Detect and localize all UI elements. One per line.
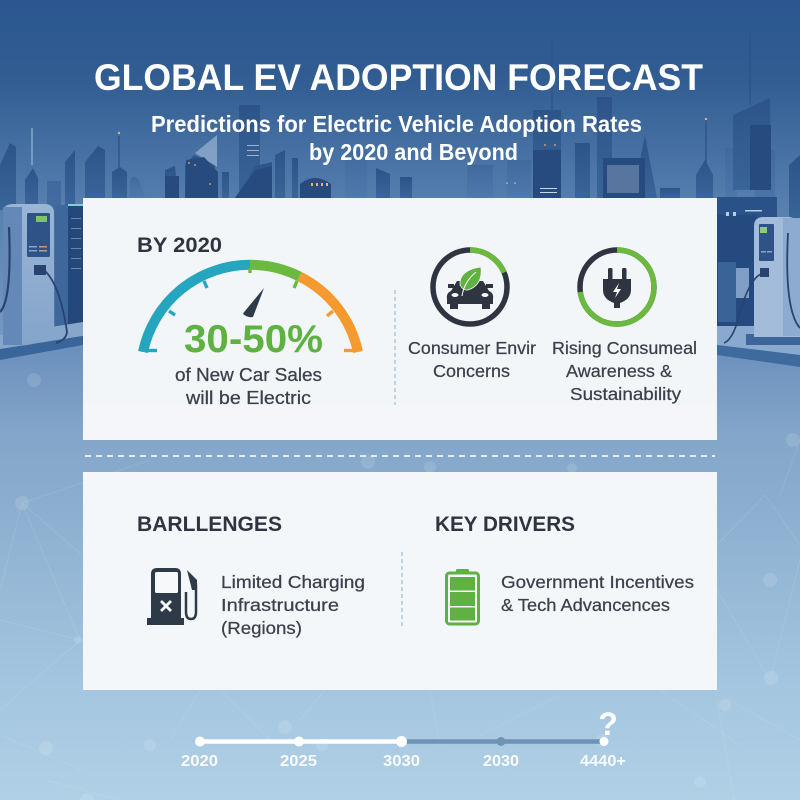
subtitle bbox=[151, 111, 642, 165]
big value: 30-50% bbox=[184, 318, 323, 361]
timeline bbox=[181, 706, 626, 770]
timeline labels: 2030 bbox=[483, 753, 519, 770]
city skyline bbox=[0, 33, 800, 341]
title: GLOBAL EV ADOPTION FORECAST bbox=[94, 57, 703, 98]
heading: key drivers: KEY DRIVERS bbox=[435, 512, 575, 536]
label: consumer concerns: Consumer Envir bbox=[408, 338, 536, 358]
label: consumer concerns bbox=[408, 338, 536, 381]
icon: plug bbox=[580, 250, 654, 324]
network background lines bbox=[0, 440, 800, 800]
label: rising awareness: Rising Consumeal bbox=[552, 338, 697, 358]
text: government incentives bbox=[501, 572, 694, 615]
gauge bbox=[143, 265, 358, 352]
gauge needle bbox=[243, 288, 264, 317]
label: rising awareness: Awareness & bbox=[566, 361, 672, 381]
subtitle: Predictions for Electric Vehicle Adoption Rates bbox=[151, 111, 642, 137]
heading: challenges: BARLLENGES bbox=[137, 512, 282, 536]
text: limited charging: Limited Charging bbox=[221, 572, 365, 592]
icon: fuel pump bbox=[147, 568, 197, 625]
icon: left charging station bbox=[0, 204, 67, 346]
timeline labels bbox=[181, 753, 626, 770]
timeline labels: 3030 bbox=[383, 753, 420, 770]
text: limited charging: Infrastructure bbox=[221, 595, 339, 615]
gauge caption bbox=[175, 365, 322, 408]
icon: right charging station bbox=[724, 217, 800, 345]
panel: challenges and drivers bbox=[83, 472, 717, 690]
timeline labels: 2025 bbox=[280, 753, 317, 770]
label: rising awareness bbox=[552, 338, 697, 404]
right building block bbox=[717, 197, 777, 337]
icon: car with leaf bbox=[433, 250, 507, 324]
icon: battery bbox=[446, 569, 478, 624]
text: limited charging: (Regions) bbox=[221, 618, 302, 638]
question mark: ? bbox=[598, 706, 618, 742]
timeline labels: 4440+ bbox=[580, 753, 626, 770]
heading: by 2020: BY 2020 bbox=[137, 233, 222, 257]
gauge caption: of New Car Sales bbox=[175, 365, 322, 385]
text: government incentives: Government Incentives bbox=[501, 572, 694, 592]
text: limited charging bbox=[221, 572, 365, 638]
text: government incentives: & Tech Advancences bbox=[501, 595, 670, 615]
label: consumer concerns: Concerns bbox=[433, 361, 510, 381]
label: rising awareness: Sustainability bbox=[570, 384, 681, 404]
panel: forecast bbox=[83, 198, 717, 440]
road bbox=[0, 322, 800, 432]
timeline labels: 2020 bbox=[181, 753, 218, 770]
gauge caption: will be Electric bbox=[185, 388, 311, 408]
subtitle: by 2020 and Beyond bbox=[309, 139, 518, 165]
left building block bbox=[55, 204, 83, 340]
